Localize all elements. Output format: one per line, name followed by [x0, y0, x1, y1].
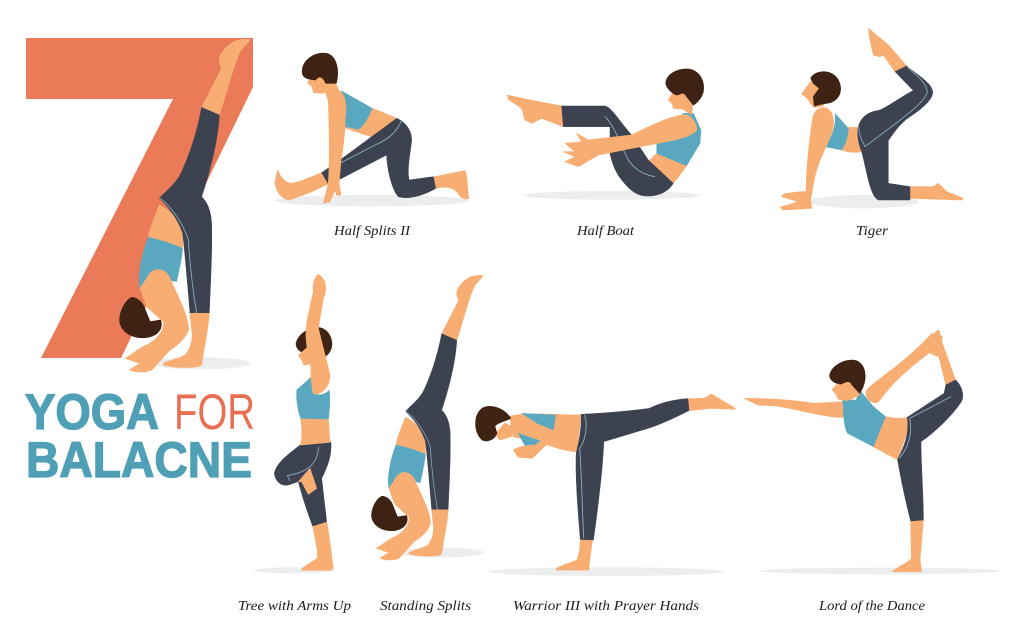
label: Tiger: Tiger [856, 224, 889, 239]
figure: lord of the dance [744, 330, 1000, 574]
figure: half splits II [275, 53, 469, 206]
big number 7 [26, 38, 253, 358]
label: Standing Splits: Standing Splits [380, 599, 472, 614]
heading: YOGA FOR BALACNE: YOGA [25, 384, 159, 440]
label: Warrior III with Prayer Hands: Warrior III with Prayer Hands [513, 599, 700, 614]
figure: tree with arms up [254, 274, 333, 573]
figure: warrior III with prayer hands [476, 394, 735, 576]
heading: YOGA FOR BALACNE: BALACNE [26, 432, 252, 488]
heading: YOGA FOR BALACNE [25, 384, 255, 488]
label: Half Boat: Half Boat [576, 224, 635, 239]
figure: half boat [507, 69, 704, 200]
figure: standing splits [372, 275, 484, 560]
figure: tiger [780, 28, 963, 210]
figure: standing splits in front of the 7 [120, 39, 251, 372]
label: Tree with Arms Up: Tree with Arms Up [238, 599, 351, 614]
heading: YOGA FOR BALACNE: FOR [174, 384, 255, 440]
label: Half Splits II: Half Splits II [333, 224, 411, 239]
label: Lord of the Dance: Lord of the Dance [818, 599, 925, 614]
